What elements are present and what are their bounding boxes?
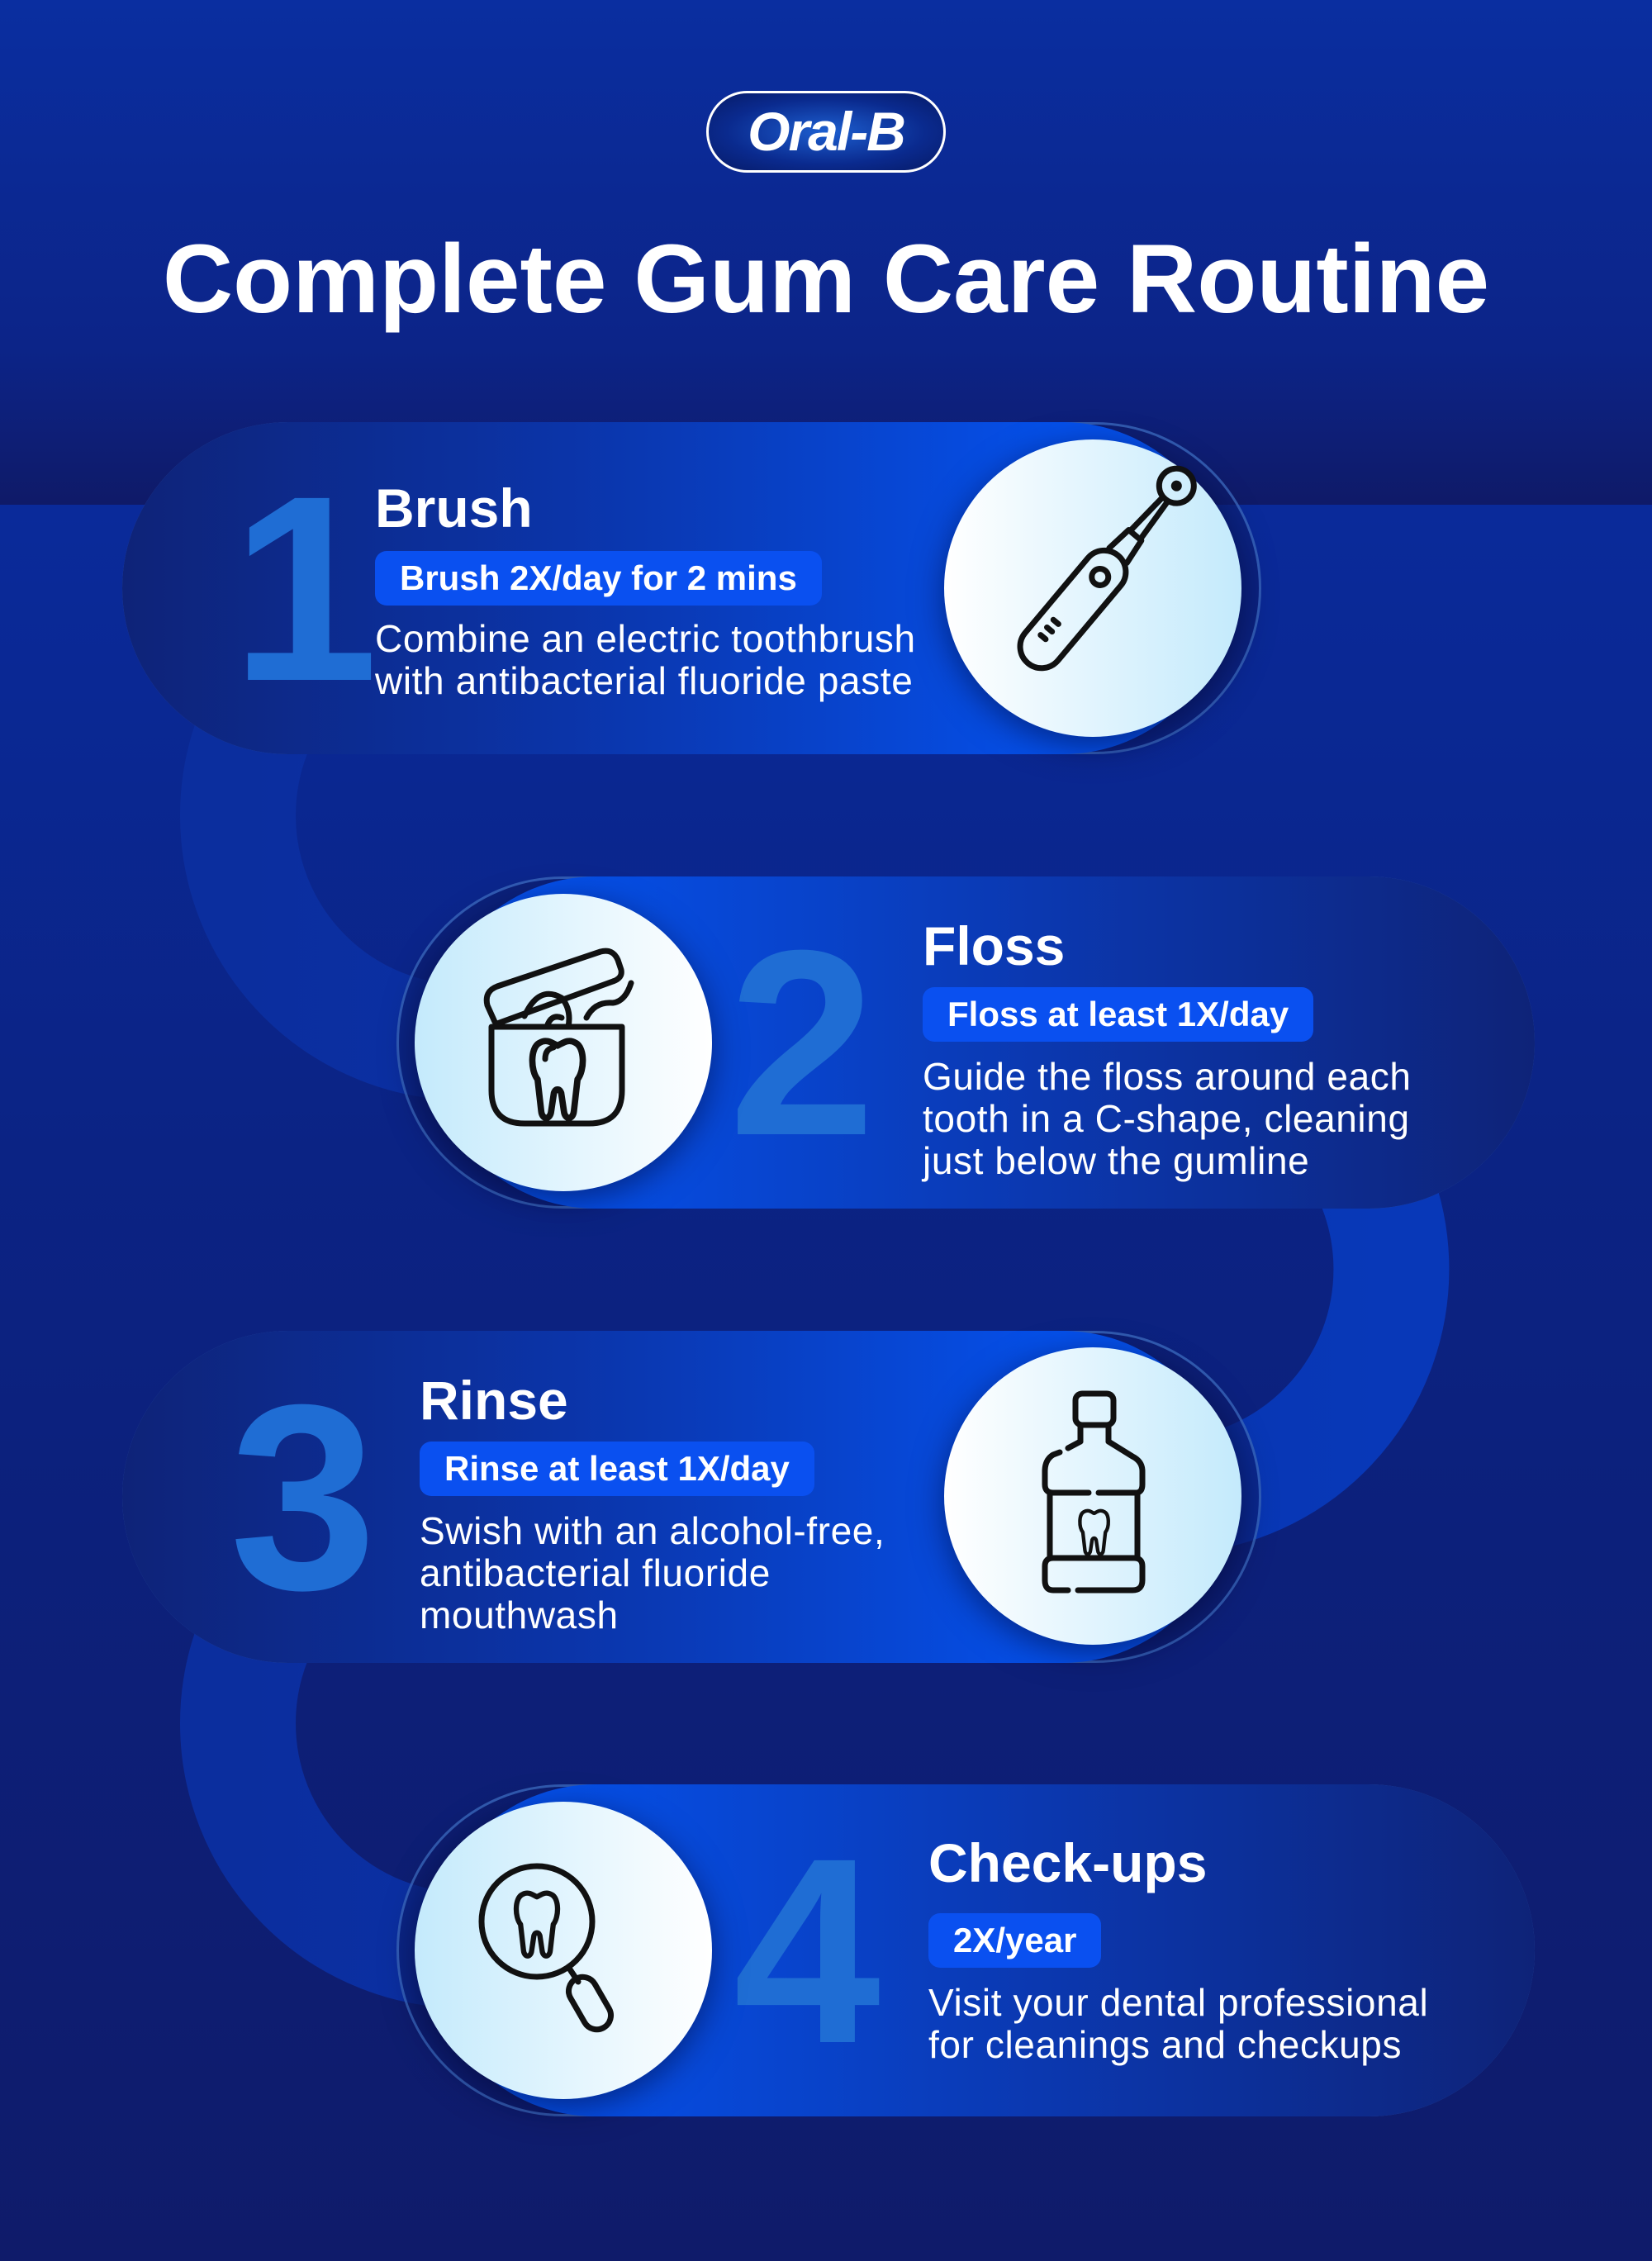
icon: floss xyxy=(415,894,712,1191)
icon: toothbrush xyxy=(944,439,1241,737)
description: just below the gumline xyxy=(923,1139,1309,1182)
number 1: 1 xyxy=(231,440,378,736)
tag: 2X/year xyxy=(953,1921,1076,1959)
icon: mouthwash bottle xyxy=(944,1347,1241,1645)
tag: Brush 2X/day for 2 mins xyxy=(400,558,797,597)
description: Swish with an alcohol-free, xyxy=(420,1509,885,1552)
heading: Rinse xyxy=(420,1370,568,1431)
heading: Check-ups xyxy=(928,1832,1207,1893)
description xyxy=(928,1981,1428,2066)
description: Combine an electric toothbrush xyxy=(375,617,916,660)
tag xyxy=(923,987,1313,1042)
tag xyxy=(928,1913,1101,1968)
number 4: 4 xyxy=(733,1803,881,2098)
logo: Oral-B xyxy=(748,101,904,162)
logo xyxy=(706,91,946,173)
description: tooth in a C-shape, cleaning xyxy=(923,1097,1410,1140)
description: Visit your dental professional xyxy=(928,1981,1428,2024)
number 3: 3 xyxy=(230,1349,377,1645)
tag: Floss at least 1X/day xyxy=(947,995,1289,1033)
tag xyxy=(375,551,822,606)
description xyxy=(420,1509,885,1636)
description: Guide the floss around each xyxy=(923,1055,1412,1098)
description: with antibacterial fluoride paste xyxy=(375,659,913,702)
number 2: 2 xyxy=(729,895,876,1190)
description: for cleanings and checkups xyxy=(928,2023,1402,2066)
icon: magnifier tooth xyxy=(415,1802,712,2099)
tag: Rinse at least 1X/day xyxy=(444,1449,790,1488)
heading: Floss xyxy=(923,915,1065,976)
tag xyxy=(420,1442,814,1496)
description xyxy=(922,1055,1412,1182)
description xyxy=(375,617,916,702)
description: antibacterial fluoride xyxy=(420,1551,771,1594)
title: Complete Gum Care Routine xyxy=(163,225,1489,334)
description: mouthwash xyxy=(420,1594,619,1636)
heading: Brush xyxy=(375,477,533,539)
